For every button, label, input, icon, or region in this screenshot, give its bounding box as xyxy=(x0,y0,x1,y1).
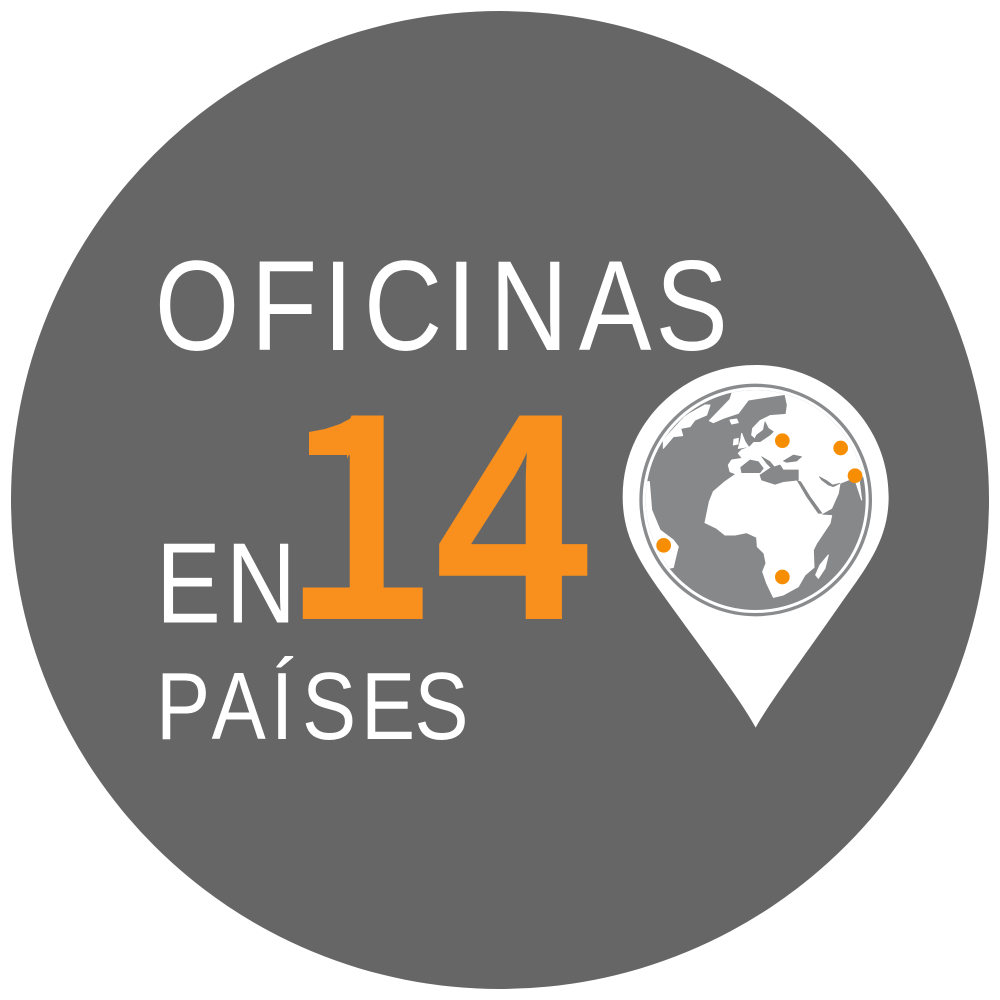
sea: Persian Gulf xyxy=(819,477,840,487)
sea: Red Sea xyxy=(797,481,822,513)
marker: Southern Africa xyxy=(775,570,790,584)
land: Ireland xyxy=(733,438,738,445)
sea: Black Sea xyxy=(783,455,802,462)
big number: 14: 1 xyxy=(285,363,433,713)
big number: 14 xyxy=(285,363,596,713)
land: Eurasia and Africa xyxy=(704,394,863,598)
land: Great Britain xyxy=(738,433,748,448)
icon: map pin with globe xyxy=(623,365,889,728)
land: Iceland xyxy=(730,419,738,424)
marker: South Asia xyxy=(848,468,862,483)
sea: east Mediterranean xyxy=(760,465,798,484)
marker: Central Asia xyxy=(833,441,848,455)
sea: Baltic xyxy=(753,422,773,442)
sea: Adriatic xyxy=(761,456,774,468)
marker: Europe xyxy=(775,433,790,448)
heading: OFICINAS: OFICINAS xyxy=(155,235,728,378)
land: Americas north xyxy=(663,405,710,448)
sea: west Mediterranean xyxy=(741,460,763,473)
pin body xyxy=(623,365,889,728)
land: Greenland and Arctic xyxy=(708,390,785,424)
big number: 14: 4 xyxy=(430,363,596,713)
text: EN: EN xyxy=(156,520,296,647)
office markers xyxy=(656,433,862,584)
land: Madagascar xyxy=(816,555,828,578)
globe ring xyxy=(641,385,870,615)
land: South America xyxy=(646,481,679,568)
globe xyxy=(646,390,866,610)
ocean xyxy=(643,387,870,613)
text: PAÍSES: PAÍSES xyxy=(156,653,469,759)
marker: South America xyxy=(656,538,671,553)
